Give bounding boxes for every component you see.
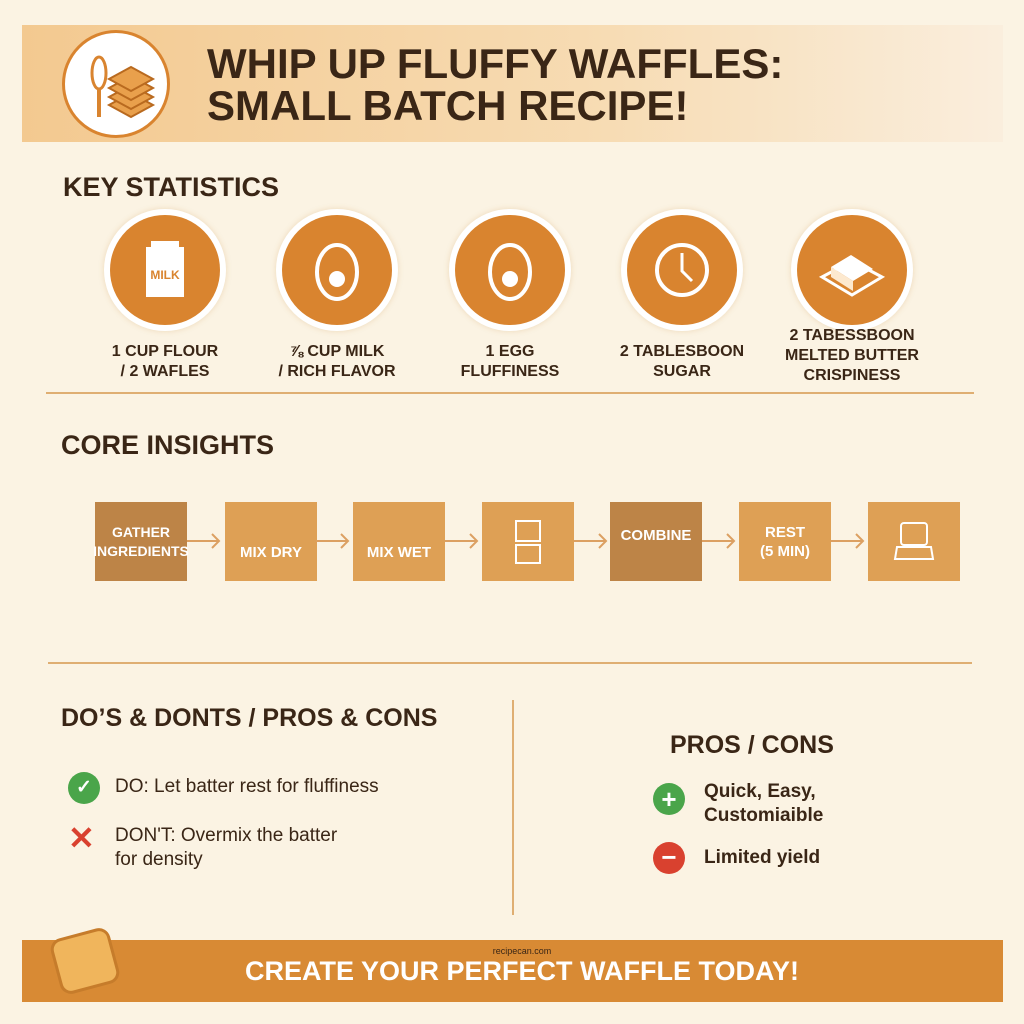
stat: butter: CRISPINESS	[804, 367, 900, 384]
step: rest: (5 MIN)	[760, 542, 810, 560]
icon: waffle	[50, 928, 120, 994]
dont item: DON'T: Overmix the batter	[115, 825, 337, 846]
footer banner	[22, 940, 1003, 1002]
dont item: ✕	[68, 820, 95, 856]
step: mix dry: MIX DRY	[240, 544, 302, 561]
arrow	[445, 533, 478, 549]
do item: DO: Let batter rest for fluffiness	[115, 776, 379, 797]
con item	[653, 842, 820, 874]
heading: core insights: CORE INSIGHTS	[61, 430, 274, 460]
dont item	[68, 820, 337, 870]
arrow	[187, 533, 220, 549]
step: waffle iron icon	[482, 502, 574, 581]
arrow	[316, 533, 350, 549]
stat: flour: 1 CUP FLOUR	[112, 343, 218, 360]
header banner	[22, 25, 1003, 142]
pro item	[653, 781, 823, 826]
heading: key statistics: KEY STATISTICS	[63, 172, 279, 202]
footer text: CREATE YOUR PERFECT WAFFLE TODAY!	[245, 956, 799, 986]
stat: sugar	[618, 206, 746, 380]
stat: flour: MILK	[150, 268, 180, 282]
step: combine	[610, 502, 702, 581]
stat: flour: / 2 WAFLES	[121, 363, 209, 380]
con item: Limited yield	[704, 847, 820, 868]
stat: butter: MELTED BUTTER	[785, 347, 919, 364]
heading: pros cons: PROS / CONS	[670, 731, 834, 759]
step: cook icon	[868, 502, 960, 581]
stat: egg: FLUFFINESS	[461, 363, 559, 380]
stat: sugar: SUGAR	[653, 363, 711, 380]
stat: egg: 1 EGG	[486, 343, 534, 360]
pro item: Quick, Easy,	[704, 781, 816, 802]
arrow	[574, 533, 608, 549]
step: gather: INGREDIENTS	[93, 542, 189, 558]
do item	[68, 772, 379, 804]
title	[207, 40, 783, 129]
step: mix dry	[225, 502, 317, 581]
pro item: Customiaible	[704, 805, 823, 826]
step: gather: GATHER	[112, 524, 170, 540]
stat: sugar: 2 TABLESBOON	[620, 343, 744, 360]
stat: butter	[785, 206, 919, 384]
title: WHIP UP FLUFFY WAFFLES:	[207, 40, 783, 87]
dont item: for density	[115, 849, 203, 870]
do item: ✓	[76, 777, 92, 798]
icon: whisk and waffles	[62, 30, 170, 138]
stat: milk: / RICH FLAVOR	[278, 363, 396, 380]
stat: milk	[274, 206, 400, 380]
pro item: +	[661, 784, 677, 814]
stat: butter: 2 TABESSBOON	[789, 327, 915, 344]
stat: flour	[102, 206, 228, 380]
stat: egg	[446, 206, 574, 380]
step: gather	[95, 502, 187, 581]
title: SMALL BATCH RECIPE!	[207, 82, 688, 129]
step: rest: REST	[765, 524, 805, 540]
step: rest	[739, 502, 831, 581]
footer banner: recipecan.com	[493, 946, 551, 956]
arrow	[831, 533, 864, 549]
heading: dos and donts: DO’S & DONTS / PROS & CONS	[61, 704, 437, 732]
process flow	[93, 502, 960, 581]
stat: milk: ⅞ CUP MILK	[290, 343, 384, 360]
con item: −	[661, 842, 677, 872]
step: combine: COMBINE	[621, 527, 691, 544]
step: mix wet	[353, 502, 445, 581]
step: mix wet: MIX WET	[367, 544, 431, 561]
arrow	[702, 533, 736, 549]
